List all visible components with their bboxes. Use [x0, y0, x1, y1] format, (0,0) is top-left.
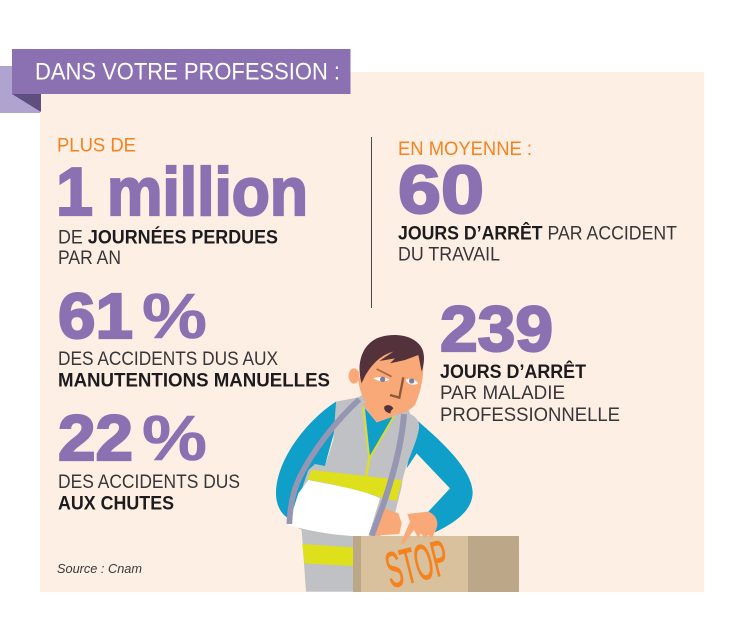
- stat: 239 jours: [440, 293, 620, 426]
- stat: 239 jours: 239: [440, 293, 553, 365]
- box: [353, 529, 519, 599]
- eyes: [373, 377, 389, 381]
- stat: 1 million: million: [107, 154, 308, 230]
- fist: [375, 508, 402, 536]
- header ribbon: [0, 49, 350, 113]
- stat: 60 jours: [398, 138, 677, 266]
- stat: 239 jours: JOURS D’ARRÊT: [440, 359, 586, 383]
- stat: 1 million: PLUS DE: [57, 134, 136, 156]
- right arm: [407, 420, 473, 532]
- stat: 239 jours: PAR MALADIE: [440, 382, 565, 404]
- divider line: [371, 137, 372, 308]
- stat: 60 jours: JOURS D’ARRÊT PAR ACCIDENT: [398, 220, 677, 244]
- stat: 1 million: PAR AN: [58, 247, 121, 269]
- stat: 22 %: %: [142, 402, 207, 474]
- neck: [363, 400, 394, 422]
- sling: [288, 480, 380, 537]
- stat: 22 %: AUX CHUTES: [58, 492, 174, 514]
- stat: 60 jours: EN MOYENNE :: [398, 138, 532, 160]
- mouth: [384, 405, 393, 413]
- stat: 61 %: MANUTENTIONS MANUELLES: [58, 370, 330, 392]
- header ribbon: DANS VOTRE PROFESSION :: [35, 58, 340, 86]
- panel: background: [40, 72, 704, 592]
- stat: 61 %: 61: [58, 280, 133, 352]
- brow: [377, 369, 392, 377]
- head: [349, 335, 424, 415]
- stat: 60 jours: DU TRAVAIL: [398, 244, 500, 266]
- source: Source : Cnam: [57, 562, 142, 576]
- stat: 1 million: 1: [56, 154, 93, 230]
- stat: 22 %: DES ACCIDENTS DUS: [58, 471, 240, 493]
- stat: 22 %: 22: [58, 402, 133, 474]
- stat: 61 %: DES ACCIDENTS DUS AUX: [58, 348, 278, 370]
- pointing hand: [401, 512, 437, 544]
- stat: 22 %: [58, 402, 240, 514]
- stat: 61 %: %: [142, 280, 207, 352]
- torso and left arm: [276, 390, 419, 592]
- box: STOP: [380, 529, 454, 599]
- stat: 1 million: [56, 134, 308, 269]
- stat: 61 %: [58, 280, 330, 392]
- nose: [390, 377, 403, 398]
- stat: 60 jours: 60: [398, 152, 484, 228]
- stat: 239 jours: PROFESSIONNELLE: [440, 404, 620, 426]
- stat: 1 million: DE JOURNÉES PERDUES: [58, 226, 278, 248]
- illustration: injured worker with box: [276, 335, 519, 599]
- yellow stripes: [302, 470, 402, 566]
- straps: [289, 399, 404, 536]
